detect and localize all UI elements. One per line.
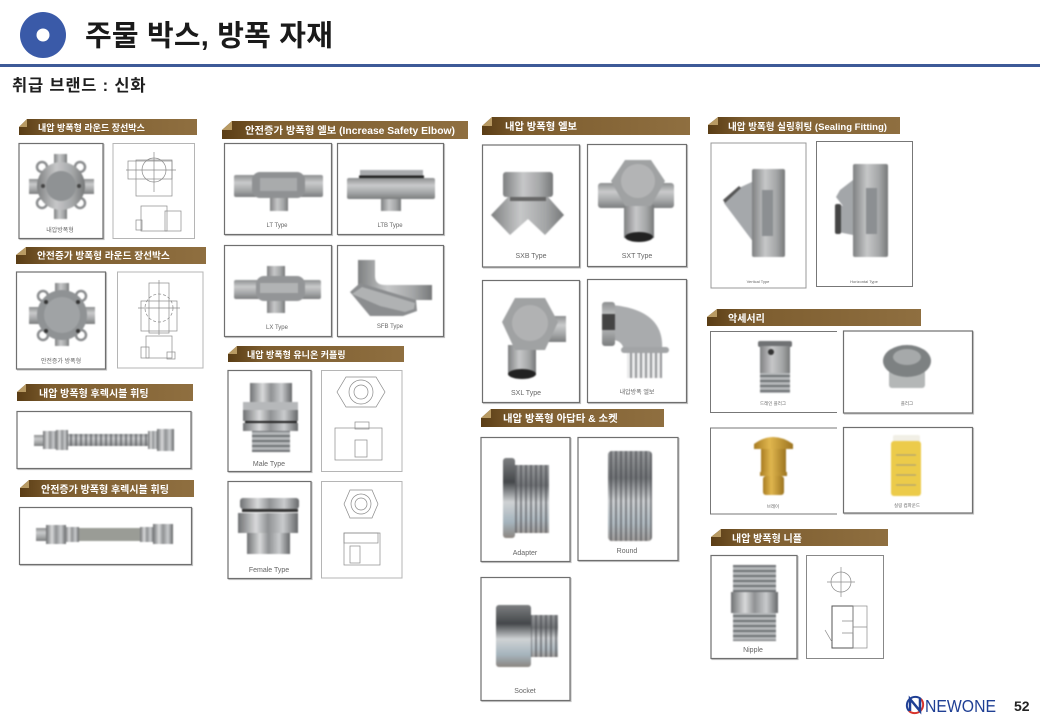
Socket: Socket [514,688,536,695]
banner [19,119,197,135]
technical drawing [113,144,194,238]
LX Type [224,246,332,336]
subtitle: brand: 취급 브랜드 : 신화 [12,76,146,95]
banner: 내압 방폭형 유니온 커플링 [247,349,346,360]
banner: 내압 방폭형 아답타 & 소켓 [503,412,618,425]
banner: 안전증가 방폭형 라운드 장선박스 [37,249,170,262]
Female Type [228,482,311,578]
SFB Type: SFB Type [377,324,404,330]
header icon: blue ring [20,12,66,58]
page number: 52 [1014,698,1030,714]
plug: 플러그 [901,400,913,407]
Socket [481,578,570,700]
Vertical Type [711,143,806,288]
drain plug: 드레인 플러그 [760,400,786,407]
SXB Type: SXB Type [515,253,547,260]
Female Type: Female Type [249,567,289,574]
logo: NEWONE: NEWONE [925,696,996,716]
panel: accessories [707,309,972,514]
SXT Type [588,144,686,266]
LX Type: LX Type [266,325,289,331]
drain plug [710,331,837,413]
LT Type [224,144,332,234]
banner [711,529,888,546]
product photo frame: 내압방폭형 [46,226,74,234]
panel: increased safety round junction box [16,247,206,369]
Horizontal Type [816,142,912,286]
Nipple [711,556,797,658]
Nipple: Nipple [743,647,763,654]
breather: 브레이 [767,503,779,510]
sealing compound bottle: 실링 컴파운드 [894,502,920,509]
banner [708,117,900,134]
breather [710,428,837,514]
Adapter [481,438,570,562]
SXL Type [482,280,580,402]
banner [17,384,193,401]
female drawing [322,482,402,578]
panel: increased safety flexible fitting [20,480,194,564]
male drawing [322,370,402,472]
panel: increased safety elbow [222,121,468,336]
sealing compound bottle [844,428,972,513]
technical drawing [118,272,203,368]
title: 주물 박스, 방폭 자재 [85,20,333,52]
Male Type [228,370,311,472]
SXT Type: SXT Type [622,253,652,260]
banner: 안전증가 방폭형 엘보 (Increase Safety Elbow) [245,124,455,137]
banner [707,309,921,326]
banner [20,480,194,497]
SXL Type: SXL Type [511,390,541,397]
product photo frame: 안전증가 방폭형 [41,357,81,365]
Vertical Type: Vertical Type [747,279,770,284]
Horizontal Type: Horizontal Type [850,279,879,284]
product photo frame [16,272,106,369]
panel: explosion-proof round junction box [19,119,197,238]
banner: 내압 방폭형 실링휘팅 (Sealing Fitting) [728,121,887,133]
panel: explosion-proof flexible fitting [17,384,193,468]
product photo frame [20,508,192,564]
Round: Round [617,548,637,555]
banner [222,121,468,139]
LTB Type [338,144,444,234]
Round [578,438,678,560]
explosion-proof elbow photo: 내압방폭 엘보 [620,388,655,396]
banner: 내압 방폭형 엘보 [505,120,578,133]
panel: explosion-proof sealing fitting [708,117,912,288]
explosion-proof elbow photo [588,280,686,402]
banner [482,117,690,135]
banner: 내압 방폭형 라운드 장선박스 [38,122,145,133]
banner [481,409,664,427]
banner: 내압 방폭형 후렉시블 휘팅 [39,387,149,400]
panel: explosion-proof nipple [711,529,888,658]
SFB Type [338,246,444,336]
banner: 안전증가 방폭형 후렉시블 휘팅 [41,483,169,496]
panel: explosion-proof adapter and socket [481,409,678,700]
nipple drawing [806,556,884,658]
SXB Type [482,145,580,267]
Adapter: Adapter [513,550,538,557]
panel: explosion-proof union coupling [228,346,404,578]
banner: 내압 방폭형 니플 [732,532,802,545]
Male Type: Male Type [253,461,285,468]
banner: 악세서리 [728,312,765,325]
panel: explosion-proof elbow [482,117,690,402]
product photo frame [19,144,103,238]
banner [228,346,404,362]
product photo frame [17,412,191,468]
LT Type: LT Type [266,223,288,229]
LTB Type: LTB Type [377,223,403,229]
banner [16,247,206,264]
plug [844,331,972,413]
